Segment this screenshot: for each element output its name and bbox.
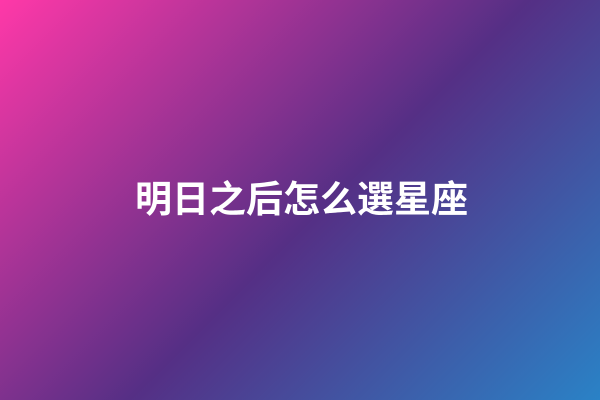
title: 明日之后怎么選星座: [135, 179, 468, 220]
